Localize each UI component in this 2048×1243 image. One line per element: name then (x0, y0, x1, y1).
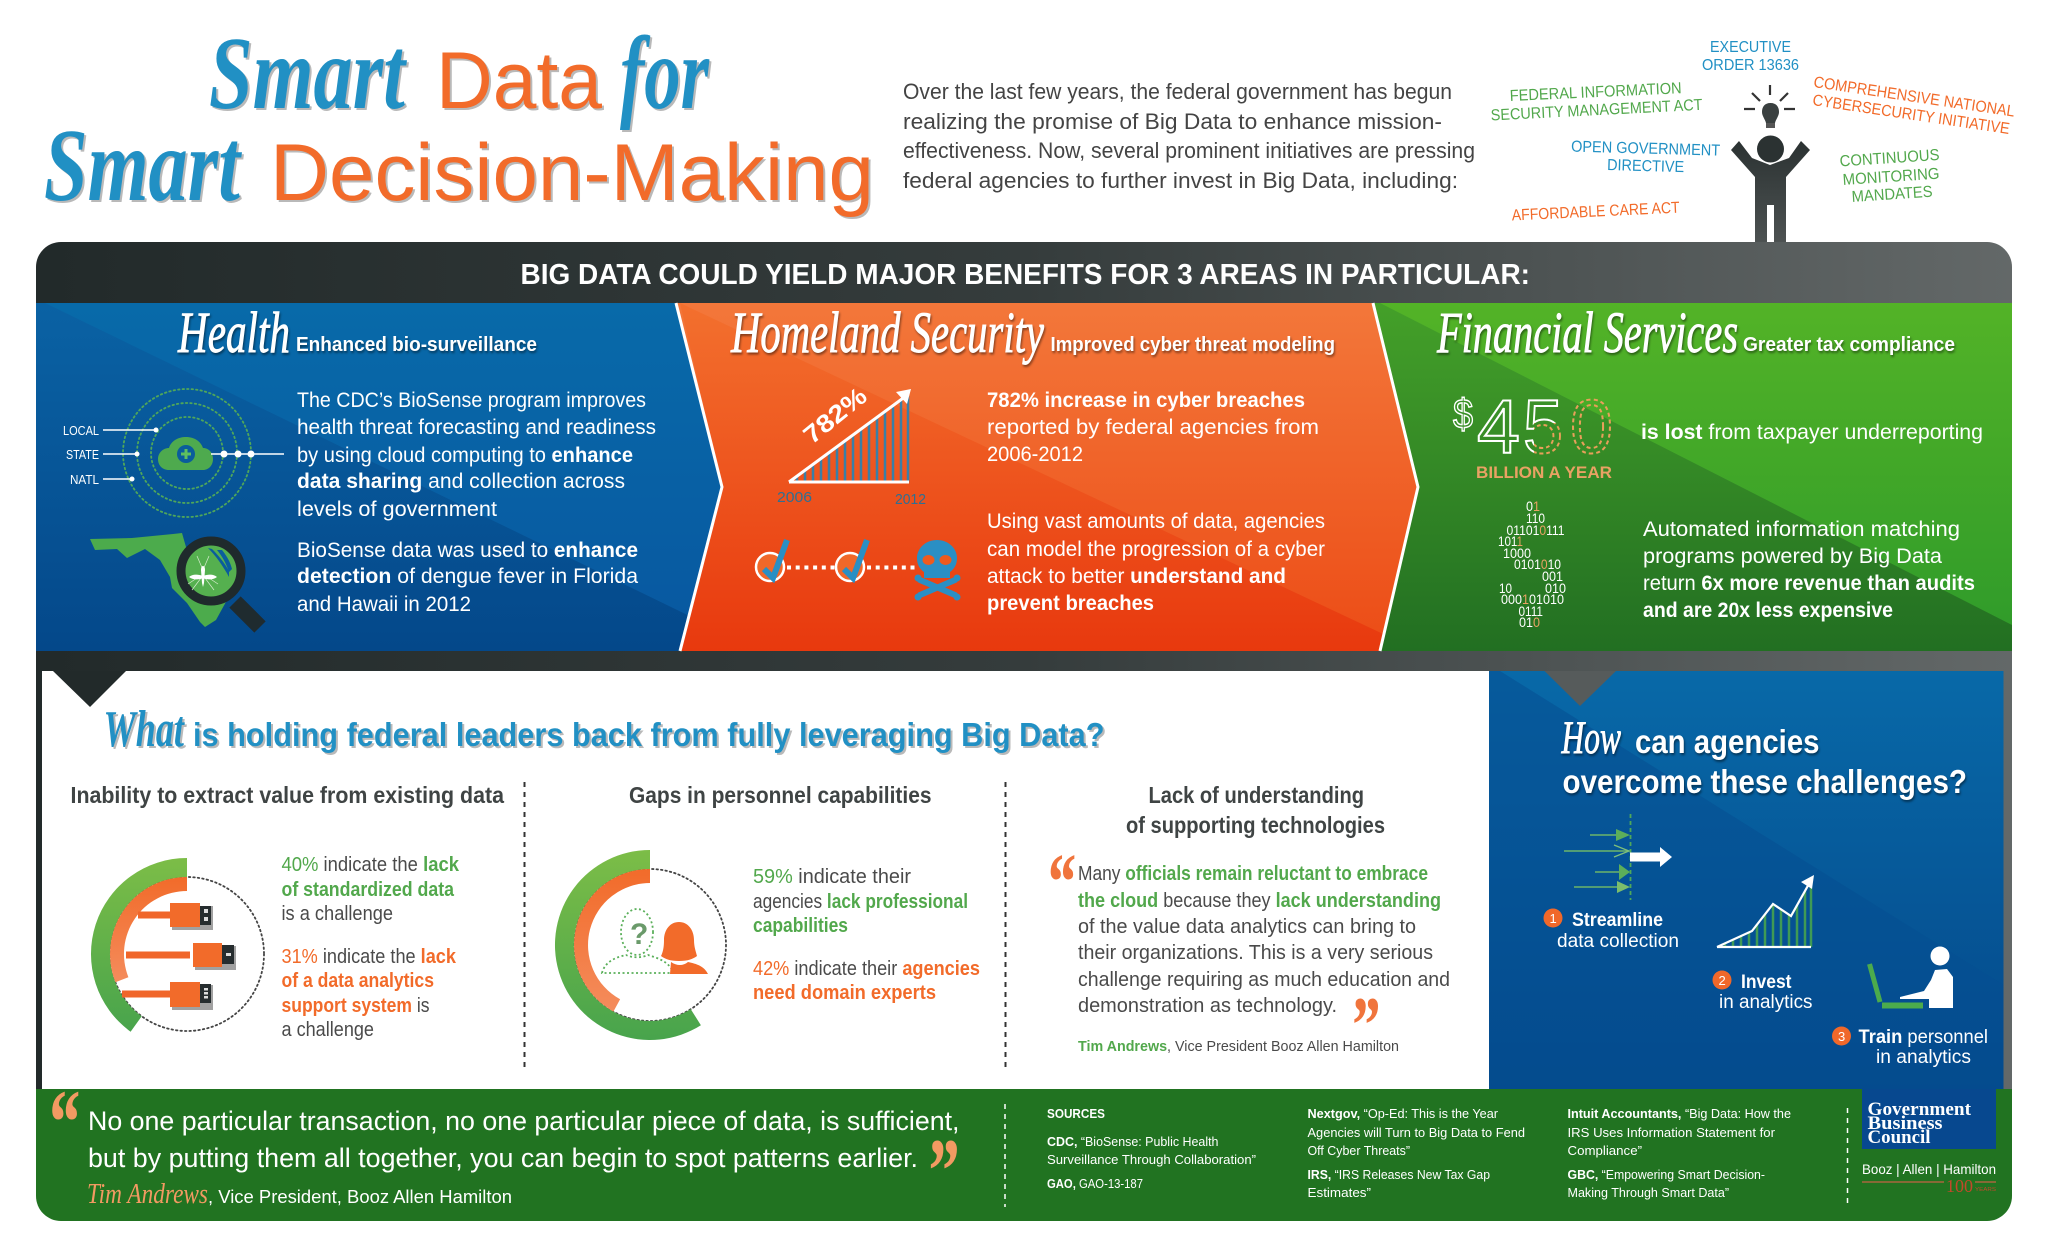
stat: 450 billion a year: 4 (1477, 385, 1520, 470)
financial body text: is lost from taxpayer underreporting (1641, 421, 1983, 444)
panel: financial services (1373, 300, 2012, 651)
challenge 1 text: of standardized data (282, 879, 455, 901)
financial body text: and are 20x less expensive (1643, 599, 1893, 622)
panel: overcome challenges (1489, 671, 2004, 1089)
sources: Intuit Accountants, “Big Data: How the (1568, 1107, 1791, 1121)
word cloud of initiatives: CONTINUOUS (1839, 147, 1940, 170)
sources (1047, 1107, 1791, 1200)
binary digits graphic: 01 (1526, 498, 1540, 514)
health body text: health threat forecasting and readiness (297, 416, 656, 439)
title: Decision-Making (270, 128, 874, 218)
quote: officials reluctant: ” (1349, 982, 1379, 1070)
step 1 label: 1 (1550, 911, 1557, 926)
challenge 2 text: 42% indicate their agencies (753, 958, 980, 980)
challenges heading: What (104, 701, 185, 758)
stat: 450 billion a year: 5 (1523, 385, 1563, 470)
challenge 1 text: is a challenge (282, 903, 393, 925)
word cloud of initiatives: MONITORING (1842, 166, 1940, 189)
title: for (620, 16, 710, 131)
intro text: effectiveness. Now, several prominent initiatives are pressing (903, 138, 1475, 163)
binary digits graphic: 10 (1499, 580, 1512, 596)
homeland body text (987, 389, 1325, 615)
chart: ring 40 and 31 percent with cables (91, 858, 264, 1032)
homeland body text: 2006-2012 (987, 443, 1083, 466)
health body text: detection of dengue fever in Florida (297, 565, 638, 588)
icon: person at laptop (1870, 946, 1953, 1008)
sources: GAO, GAO-13-187 (1047, 1177, 1143, 1191)
challenge 2 text (753, 866, 980, 1004)
sources: Nextgov, “Op-Ed: This is the Year (1308, 1107, 1498, 1121)
word cloud of initiatives: SECURITY MANAGEMENT ACT (1490, 97, 1703, 124)
sources: Agencies will Turn to Big Data to Fend (1308, 1126, 1525, 1140)
financial body text: programs powered by Big Data (1643, 545, 1942, 568)
health body text: BioSense data was used to enhance (297, 539, 638, 562)
binary digits graphic: 110 (1526, 510, 1545, 526)
chart: 782 percent increase (777, 382, 926, 508)
health body text: levels of government (297, 498, 497, 521)
quote attribution: Tim Andrews, Vice President Booz Allen Hamilton (1078, 1038, 1399, 1055)
panel: footer (36, 1071, 2012, 1222)
logo: Booz Allen Hamilton: YEARS (1975, 1187, 1997, 1193)
quote: officials reluctant: of the value data analytics can bring to (1078, 916, 1416, 938)
overcome heading: How (1561, 712, 1621, 764)
challenge 1 text: 31% indicate the lack (282, 946, 457, 968)
quote: officials reluctant: demonstration as technology. (1078, 995, 1337, 1017)
sources: CDC, “BioSense: Public Health (1047, 1135, 1219, 1149)
step 1 label: data collection (1557, 931, 1679, 952)
financial body text: Automated information matching (1643, 518, 1960, 541)
icon: cloud network levels: STATE (66, 448, 99, 462)
chart: 782 percent increase: 2012 (895, 491, 926, 508)
intro text: realizing the promise of Big Data to enhance mission- (903, 109, 1442, 134)
homeland body text: reported by federal agencies from (987, 416, 1319, 439)
challenge 2 text: capabilities (753, 915, 848, 937)
step 2 label (1712, 970, 1812, 1013)
dark frame with heading band (36, 242, 2012, 1100)
panel: challenges (42, 671, 1489, 1089)
step 1 label: Streamline (1572, 910, 1663, 931)
notch pointer (1544, 671, 1616, 706)
band heading: BIG DATA COULD YIELD MAJOR BENEFITS FOR 3 AREAS IN PARTICULAR: (520, 259, 1530, 291)
quote: officials reluctant: “ (1045, 839, 1075, 927)
word cloud of initiatives: OPEN GOVERNMENT (1571, 139, 1721, 160)
icon: attack progression checks and skull (756, 540, 960, 600)
sources: Compliance” (1568, 1144, 1642, 1158)
financial body text: return 6x more revenue than audits (1643, 572, 1975, 595)
chart: ring 59 and 42 percent with people: ? (630, 918, 648, 951)
panel dividers (676, 303, 1418, 651)
step 3 label (1832, 1026, 1988, 1068)
challenges heading (104, 701, 1104, 758)
word cloud of initiatives: ORDER 13636 (1702, 57, 1799, 74)
stat: 450 billion a year: 5 (1523, 385, 1563, 470)
step 3 label: 3 (1838, 1029, 1845, 1044)
overcome heading: overcome these challenges? (1562, 763, 1967, 800)
logo: Booz Allen Hamilton: 100 (1946, 1176, 1973, 1196)
logo: Booz Allen Hamilton (1862, 1161, 1997, 1196)
sources: Estimates” (1308, 1186, 1371, 1200)
challenge 1 heading: Inability to extract value from existing data (70, 782, 504, 808)
financial body text (1641, 421, 1983, 622)
sources: Making Through Smart Data” (1568, 1186, 1729, 1200)
quote: officials reluctant (1045, 839, 1450, 1070)
homeland body text: can model the progression of a cyber (987, 538, 1325, 561)
step 1 label (1544, 908, 1679, 952)
homeland body text: prevent breaches (987, 592, 1154, 615)
icon: cloud network levels (63, 389, 284, 517)
binary digits graphic: 1011 (1498, 533, 1523, 549)
challenge 3 heading: Lack of understanding (1148, 782, 1364, 808)
chart: 782 percent increase: 782% (798, 382, 873, 450)
quote: officials reluctant: the cloud because they lack understanding (1078, 890, 1441, 912)
binary digits graphic: 000101010 (1501, 591, 1564, 607)
health heading: Enhanced bio-surveillance (296, 334, 537, 356)
binary digits graphic: 011010111 (1506, 522, 1565, 538)
stat: 450 billion a year: 0 (1570, 385, 1613, 470)
footer dividers (1005, 1104, 1848, 1207)
title: Smart (44, 108, 242, 223)
logo: Government Business Council: Business (1868, 1113, 1942, 1134)
binary digits graphic: 010 (1545, 580, 1566, 596)
overcome heading: can agencies (1635, 723, 1820, 760)
challenge 1 text: 40% indicate the lack (282, 854, 460, 876)
binary digits graphic: 010 (1519, 614, 1540, 630)
word cloud of initiatives: AFFORDABLE CARE ACT (1511, 200, 1680, 224)
challenge 1 text: support system is (282, 995, 430, 1017)
logo: Booz Allen Hamilton: Booz | Allen | Hamilton (1862, 1161, 1996, 1177)
stat: 450 billion a year: BILLION A YEAR (1476, 463, 1612, 482)
quote: officials reluctant: their organizations. This is a very serious (1078, 942, 1433, 964)
column dividers (524, 782, 1006, 1071)
logo: Government Business Council: Government (1868, 1099, 1972, 1120)
homeland body text: 782% increase in cyber breaches (987, 389, 1305, 412)
challenge 1 text (282, 854, 460, 1041)
footer quote: “ (46, 1071, 79, 1173)
binary digits graphic (1498, 498, 1566, 630)
overcome heading (1561, 712, 1967, 800)
intro text: federal agencies to further invest in Big Data, including: (903, 168, 1458, 193)
title: Smart (209, 16, 407, 131)
financial heading: Greater tax compliance (1743, 334, 1955, 356)
panel: homeland security (676, 300, 1418, 651)
quote: officials reluctant: challenge requiring as much education and (1078, 969, 1450, 991)
footer quote (46, 1071, 960, 1222)
challenge 3 heading: of supporting technologies (1126, 812, 1385, 838)
footer quote: , Vice President, Booz Allen Hamilton (208, 1187, 512, 1207)
word cloud of initiatives: COMPREHENSIVE NATIONAL (1812, 74, 2016, 121)
health body text: The CDC’s BioSense program improves (297, 389, 646, 412)
sources: Off Cyber Threats” (1308, 1144, 1410, 1158)
homeland body text: attack to better understand and (987, 565, 1286, 588)
homeland heading: Homeland Security (730, 300, 1044, 365)
word cloud of initiatives: FEDERAL INFORMATION (1509, 80, 1682, 105)
panel: health (36, 300, 722, 651)
icon: person with lightbulb (1731, 85, 1810, 243)
chart: invest growth (1717, 875, 1814, 947)
homeland body text: Using vast amounts of data, agencies (987, 510, 1325, 533)
stat: 450 billion a year: $ (1453, 390, 1473, 437)
sources: GBC, “Empowering Smart Decision- (1568, 1168, 1765, 1182)
footer quote: No one particular transaction, no one particular piece of data, is sufficient, (88, 1106, 960, 1136)
logo: Government Business Council: Council (1868, 1127, 1930, 1148)
stat: 450 billion a year (1452, 396, 1612, 478)
intro text: Over the last few years, the federal government has begun (903, 79, 1452, 104)
icon: cloud network levels: LOCAL (63, 424, 99, 438)
challenge 2 text: need domain experts (753, 982, 936, 1004)
health heading (177, 300, 537, 365)
quote: officials reluctant: Many officials remain reluctant to embrace (1078, 863, 1428, 885)
step 2 label: 2 (1718, 973, 1726, 988)
challenge 1 text: of a data analytics (282, 970, 434, 992)
health heading: Health (177, 300, 290, 365)
health body text: data sharing and collection across (297, 470, 625, 493)
challenge 2 text: agencies lack professional (753, 891, 968, 913)
word cloud of initiatives: MANDATES (1851, 184, 1933, 206)
step 3 label: Train personnel (1858, 1027, 1988, 1048)
step 2 label: Invest (1741, 972, 1792, 993)
chart: ring 59 and 42 percent with people (555, 850, 726, 1040)
title (44, 16, 874, 223)
notch pointer (53, 671, 126, 707)
icon: Florida with magnifier and mosquito (90, 533, 260, 627)
health body text (297, 389, 656, 616)
icon: cloud network levels: NATL (70, 473, 99, 487)
intro text (903, 79, 1475, 193)
footer quote: Tim Andrews (87, 1178, 208, 1210)
word cloud of initiatives: DIRECTIVE (1607, 157, 1684, 176)
sources: IRS Uses Information Statement for (1568, 1126, 1775, 1140)
logo: Government Business Council (1862, 1089, 1996, 1149)
sources: Surveillance Through Collaboration” (1047, 1153, 1256, 1167)
step 3 label: in analytics (1876, 1047, 1971, 1068)
word cloud of initiatives: EXECUTIVE (1710, 39, 1791, 56)
binary digits graphic: 0111 (1518, 603, 1543, 619)
footer quote: but by putting them all together, you can begin to spot patterns earlier. (88, 1143, 918, 1173)
challenge 2 text: 59% indicate their (753, 866, 911, 888)
word cloud of initiatives (1490, 39, 2016, 224)
challenge 1 text: a challenge (282, 1019, 374, 1041)
financial heading: Financial Services (1436, 300, 1738, 365)
health body text: and Hawaii in 2012 (297, 593, 471, 616)
challenge 2 heading: Gaps in personnel capabilities (629, 782, 932, 808)
health body text: by using cloud computing to enhance (297, 444, 633, 467)
binary digits graphic: 001 (1542, 568, 1563, 584)
binary digits graphic: 0101010 (1514, 556, 1561, 572)
chart: 782 percent increase: 2006 (777, 489, 812, 506)
step 2 label: in analytics (1719, 992, 1812, 1013)
title: Data (436, 36, 603, 126)
sources: SOURCES (1047, 1107, 1105, 1121)
binary digits graphic: 1000 (1503, 545, 1531, 561)
sources: IRS, “IRS Releases New Tax Gap (1308, 1168, 1490, 1182)
word cloud of initiatives: CYBERSECURITY INITIATIVE (1811, 92, 2011, 138)
challenges heading: is holding federal leaders back from fully leveraging Big Data? (193, 716, 1104, 753)
icon: streamline arrows (1564, 814, 1672, 900)
footer quote: ” (925, 1120, 958, 1222)
homeland heading: Improved cyber threat modeling (1050, 334, 1335, 356)
challenge 3 heading (1126, 782, 1385, 838)
